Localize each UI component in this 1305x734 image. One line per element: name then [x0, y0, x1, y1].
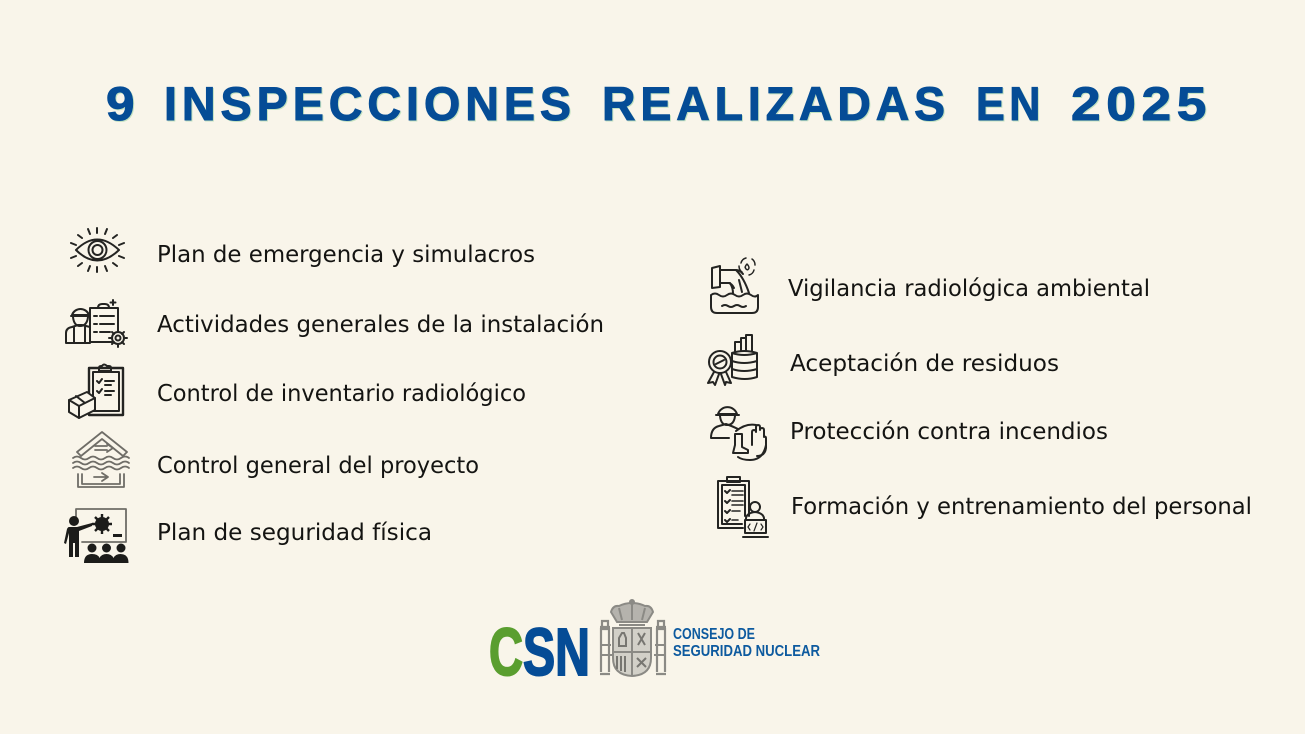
- logo: coat of arms: [600, 600, 666, 676]
- logo wordmark: C: [489, 615, 523, 690]
- logo: CSN: [489, 600, 820, 690]
- title: 2025: [1071, 77, 1212, 130]
- icon: clipboard and box: [69, 364, 123, 418]
- title: REALIZADAS: [602, 77, 950, 130]
- logo text: SEGURIDAD NUCLEAR: [673, 643, 820, 660]
- icon: presenter with audience: [64, 509, 128, 563]
- logo wordmark: SN: [523, 615, 590, 690]
- left column list: [64, 228, 604, 563]
- text: plan de seguridad: Plan de seguridad física: [157, 520, 432, 546]
- text: plan de emergencia: Plan de emergencia y simulacros: [157, 242, 535, 268]
- text: control de inventario: Control de inventario radiológico: [157, 381, 526, 407]
- icon: building with water flow: [73, 432, 129, 487]
- icon: checklist with programmer: [718, 477, 768, 537]
- title: INSPECCIONES: [164, 77, 576, 130]
- logo text: [673, 626, 820, 660]
- text: actividades generales: Actividades generales de la instalación: [157, 312, 604, 338]
- text: control general: Control general del proyecto: [157, 453, 479, 479]
- icon: eye: [71, 228, 124, 272]
- text: aceptacion de residuos: Aceptación de residuos: [790, 351, 1059, 377]
- right column list: [708, 258, 1252, 537]
- icon: worker with checklist and gear: [66, 300, 127, 347]
- icon: rosette and database: [708, 335, 757, 385]
- logo wordmark: [489, 615, 590, 690]
- title: 9: [106, 77, 140, 130]
- text: proteccion contra incendios: Protección contra incendios: [790, 419, 1108, 445]
- icon: discharge pipe into basin: [711, 258, 758, 313]
- text: formacion y entrenamiento: Formación y entrenamiento del personal: [791, 494, 1252, 520]
- icon: worker with stop hand: [711, 407, 766, 460]
- logo text: CONSEJO DE: [673, 626, 755, 643]
- text: vigilancia radiologica: Vigilancia radiológica ambiental: [788, 276, 1150, 302]
- title: EN: [976, 77, 1045, 130]
- title: [106, 77, 1212, 130]
